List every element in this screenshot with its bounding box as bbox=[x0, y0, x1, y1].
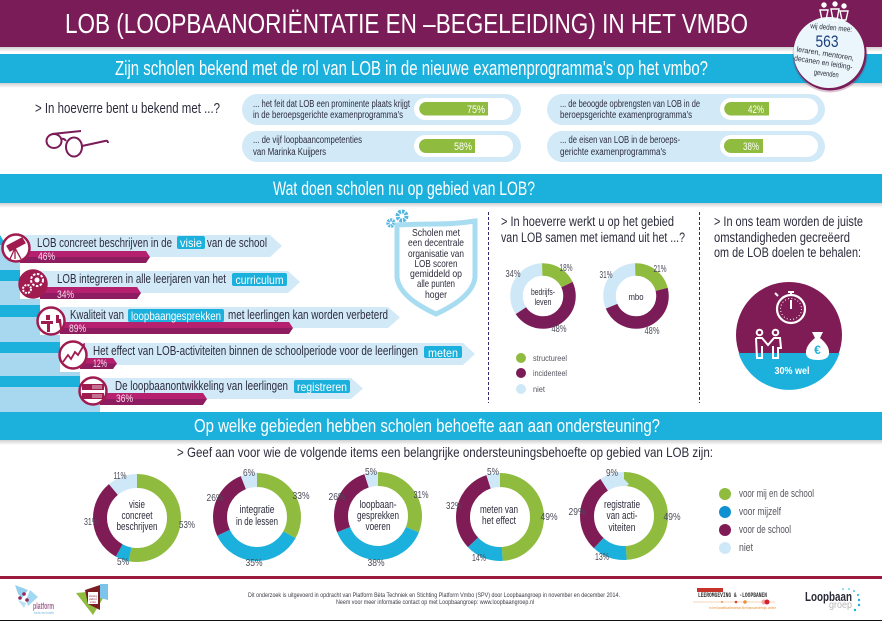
awareness bar: 42%: 42% bbox=[748, 104, 764, 116]
step 5: registreren: registreren bbox=[297, 380, 347, 394]
step 2: curriculum: LOB integreren in alle leerjaren van het bbox=[57, 272, 226, 286]
donut: loopbaangesprekken: 38% bbox=[368, 557, 384, 569]
badge: respondents: gevenden bbox=[813, 68, 839, 80]
icon: money bag: € bbox=[814, 343, 821, 357]
section band 3 bbox=[0, 412, 882, 445]
legend: support: voor mijzelf bbox=[739, 506, 782, 518]
footer credits: Dit onderzoek is uitgevoerd in opdracht van Platform Bèta Techniek en Stichting Platform Vmbo (SPV) door Loopbaangroep in november en december 2014. bbox=[248, 593, 620, 599]
question: collaboration: > In hoeverre werkt u op het gebied bbox=[501, 214, 674, 229]
step 3: loopbaangesprekken: Kwaliteit van bbox=[70, 308, 124, 322]
step 1: visie bbox=[2, 234, 282, 263]
logo: leeromgeving en loopbanen: LEEROMGEVING & -LOOPBANEN bbox=[698, 592, 767, 599]
section band 3: Op welke gebieden hebben scholen behoefte aan aan ondersteuning? bbox=[194, 416, 660, 436]
step 3: loopbaangesprekken bbox=[38, 307, 400, 335]
donut: visie: 5% bbox=[117, 556, 129, 568]
logo: platform beta techniek: platform bbox=[33, 601, 54, 611]
callout: shield: LOB scoren bbox=[414, 258, 458, 270]
legend: collaboration bbox=[516, 353, 567, 394]
donut: registratie: registratie bbox=[604, 499, 640, 511]
awareness bar: 58%: ... de vijf loopbaancompetenties bbox=[253, 135, 362, 146]
donut: bedrijfsleven bbox=[506, 262, 572, 335]
legend: support: voor mij en de school bbox=[739, 488, 814, 500]
step 1: visie: visie bbox=[180, 236, 202, 250]
step 4: meten: 12% bbox=[93, 358, 107, 370]
staircase background bbox=[0, 235, 100, 412]
awareness bar: 38% bbox=[547, 131, 825, 162]
question: team conditions: omstandigheden gecreëerd bbox=[714, 230, 850, 245]
legend: collaboration: structureel bbox=[533, 353, 567, 363]
donut: registratie: 13% bbox=[595, 551, 609, 563]
donut: meten: 32% bbox=[446, 500, 462, 512]
awareness bar: 42% bbox=[547, 94, 825, 125]
donut: visie: 31% bbox=[84, 516, 98, 528]
awareness bar: 58% bbox=[242, 131, 521, 162]
donut: integratie: 6% bbox=[243, 467, 255, 479]
donut: registratie: 29% bbox=[568, 506, 586, 518]
donut: integratie: 26% bbox=[206, 492, 224, 504]
icon: handshake bbox=[756, 330, 781, 358]
donut: loopbaangesprekken: 5% bbox=[365, 466, 377, 478]
donut: integratie: 35% bbox=[246, 557, 262, 569]
logo: platform vmbo bbox=[76, 584, 108, 615]
awareness bar: 75%: in de beroepsgerichte examenprogramma's bbox=[253, 110, 403, 121]
awareness bar: 38%: 38% bbox=[743, 141, 759, 153]
badge: respondents: 563 bbox=[816, 32, 838, 51]
donut: loopbaangesprekken bbox=[328, 466, 428, 569]
step 3: loopbaangesprekken: met leerlingen kan worden verbeterd bbox=[228, 308, 388, 322]
donut: registratie: 9% bbox=[606, 467, 618, 479]
donut: mbo: 21% bbox=[654, 263, 666, 275]
icon: stopwatch bbox=[775, 292, 805, 323]
callout: shield: hoger bbox=[425, 289, 447, 301]
donut: meten: 14% bbox=[472, 552, 486, 564]
donut: registratie: van acti- bbox=[606, 510, 638, 522]
awareness bar: 58%: van Marinka Kuijpers bbox=[253, 147, 326, 158]
callout: shield: een decentrale bbox=[408, 237, 464, 249]
step 3: loopbaangesprekken: 89% bbox=[69, 323, 86, 335]
footer credits: Neem voor meer informatie contact op met Loopbaangroep: www.loopbaangroep.nl bbox=[336, 600, 534, 606]
step 4: meten bbox=[60, 342, 475, 370]
circle: 30% wel: 30% wel bbox=[774, 365, 810, 377]
legend: collaboration: incidenteel bbox=[533, 368, 567, 378]
donut: meten: 5% bbox=[487, 466, 499, 478]
icon: three people bbox=[820, 2, 848, 20]
section band 2 bbox=[0, 174, 882, 208]
donut: visie: visie bbox=[129, 499, 145, 511]
donut: mbo: mbo bbox=[628, 292, 644, 303]
donut: meten: 49% bbox=[540, 511, 558, 523]
step 5: registreren: 36% bbox=[116, 393, 133, 405]
step 5: registreren: De loopbaanontwikkeling van leerlingen bbox=[115, 379, 288, 393]
donut: visie: concreet bbox=[122, 510, 152, 522]
step 1: visie: LOB concreet beschrijven in de bbox=[37, 236, 172, 250]
badge: respondents bbox=[792, 2, 868, 92]
question: collaboration bbox=[501, 214, 685, 245]
icon: records bbox=[80, 378, 106, 404]
icon: gears bbox=[20, 270, 46, 298]
header banner bbox=[0, 0, 882, 52]
callout: shield bbox=[388, 212, 475, 314]
donut: visie: 53% bbox=[179, 519, 195, 531]
step 4: meten: meten bbox=[428, 346, 458, 360]
donut: visie bbox=[84, 470, 195, 568]
callout: shield: gemiddeld op bbox=[410, 268, 462, 280]
donut: loopbaangesprekken: gesprekken bbox=[357, 510, 399, 522]
donut: integratie: integratie bbox=[240, 504, 274, 516]
donut: meten: meten van bbox=[480, 504, 518, 516]
footer credits bbox=[248, 593, 620, 606]
logo: loopbaangroep: Loopbaan bbox=[805, 589, 852, 604]
donut: bedrijfsleven: 34% bbox=[506, 268, 520, 280]
awareness bar: 75%: ... het feit dat LOB een prominente plaats krijgt bbox=[253, 99, 410, 110]
legend: collaboration: niet bbox=[533, 384, 546, 394]
step 2: curriculum bbox=[20, 270, 300, 301]
awareness bar: 75%: 75% bbox=[467, 104, 485, 116]
donut: bedrijfsleven: bedrijfs- bbox=[531, 287, 555, 298]
icon: gears on shield bbox=[388, 212, 406, 226]
donut: visie: beschrijven bbox=[116, 521, 158, 533]
donut: registratie: 49% bbox=[664, 511, 680, 523]
logo: leeromgeving en loopbanen bbox=[693, 588, 777, 610]
donut: loopbaangesprekken: 31% bbox=[414, 489, 428, 501]
icon: glasses bbox=[46, 131, 108, 156]
callout: shield: Scholen met bbox=[412, 227, 460, 239]
question: support: > Geef aan voor wie de volgende items een belangrijke ondersteuningsbehoefte op gebied van LOB zijn: bbox=[177, 444, 713, 460]
badge: respondents: leraren, mentoren, bbox=[796, 45, 855, 63]
badge: respondents: decanen en leiding- bbox=[794, 53, 854, 72]
donut: integratie bbox=[206, 467, 310, 569]
section band 2: Wat doen scholen nu op gebied van LOB? bbox=[273, 179, 535, 200]
awareness bar: 75% bbox=[242, 94, 521, 125]
section band 1 bbox=[0, 54, 882, 88]
awareness bar: 42%: ... de beoogde opbrengsten van LOB in de bbox=[560, 99, 700, 110]
icon: telescope bbox=[2, 234, 30, 262]
legend: support: voor de school bbox=[739, 524, 791, 536]
donut: meten bbox=[446, 466, 558, 564]
logo: loopbaangroep bbox=[805, 588, 860, 611]
logo: platform vmbo: vmbo bbox=[90, 600, 96, 604]
logo: platform vmbo: platform bbox=[89, 597, 97, 601]
awareness bar: 38%: ... de eisen van LOB in de beroeps- bbox=[560, 135, 680, 146]
donut: loopbaangesprekken: 26% bbox=[328, 491, 346, 503]
donut: bedrijfsleven: 18% bbox=[560, 262, 572, 274]
callout: shield: alle punten bbox=[417, 278, 455, 290]
circle: 30% wel bbox=[736, 282, 842, 390]
question: awareness: > In hoeverre bent u bekend met ...? bbox=[35, 101, 220, 117]
step 3: loopbaangesprekken: loopbaangesprekken bbox=[131, 309, 221, 323]
donut: registratie bbox=[568, 467, 680, 563]
step 4: meten: Het effect van LOB-activiteiten binnen de schoolperiode voor de leerlingen bbox=[93, 344, 418, 358]
donut: mbo: 48% bbox=[644, 325, 660, 337]
legend: support: niet bbox=[739, 542, 753, 554]
badge: respondents: wij deden mee: bbox=[809, 21, 853, 34]
donut: meten: het effect bbox=[482, 515, 516, 527]
callout: shield: organisatie van bbox=[408, 248, 464, 260]
question: collaboration: van LOB samen met iemand uit het ...? bbox=[501, 230, 685, 245]
donut: loopbaangesprekken: loopbaan- bbox=[360, 499, 397, 511]
icon: conversation bbox=[38, 308, 64, 334]
donut: visie: 11% bbox=[114, 470, 126, 482]
awareness bar: 58%: 58% bbox=[454, 141, 472, 153]
awareness bar: 42%: beroepsgerichte examenprogramma's bbox=[560, 110, 692, 121]
legend: support bbox=[719, 488, 814, 554]
step 5: registreren bbox=[80, 378, 363, 405]
donut: mbo: 31% bbox=[600, 269, 612, 281]
step 2: curriculum: 34% bbox=[57, 289, 74, 301]
donut: integratie: in de lessen bbox=[236, 516, 278, 528]
donut: bedrijfsleven: leven bbox=[534, 297, 552, 308]
logo: platform beta techniek: bèta techniek bbox=[34, 610, 54, 615]
donut: registratie: viteiten bbox=[608, 522, 636, 534]
step 1: visie: 46% bbox=[38, 251, 55, 263]
step 2: curriculum: curriculum bbox=[236, 273, 284, 287]
icon: rising chart bbox=[60, 342, 86, 368]
logo: platform vmbo: stichting bbox=[89, 594, 97, 598]
donut: bedrijfsleven: 48% bbox=[552, 323, 566, 335]
donut: mbo bbox=[600, 263, 666, 337]
donut: loopbaangesprekken: voeren bbox=[366, 521, 390, 533]
step 1: visie: van de school bbox=[207, 236, 267, 250]
question: team conditions bbox=[714, 214, 863, 260]
logo: loopbaangroep: groep bbox=[829, 600, 852, 611]
logo: platform beta techniek bbox=[15, 585, 54, 615]
awareness bar: 38%: gerichte examenprogramma's bbox=[560, 147, 666, 158]
donut: integratie: 33% bbox=[292, 490, 310, 502]
logo: leeromgeving en loopbanen: in het kwalificatiestelsel Beroepsonderwijs online bbox=[709, 605, 777, 610]
